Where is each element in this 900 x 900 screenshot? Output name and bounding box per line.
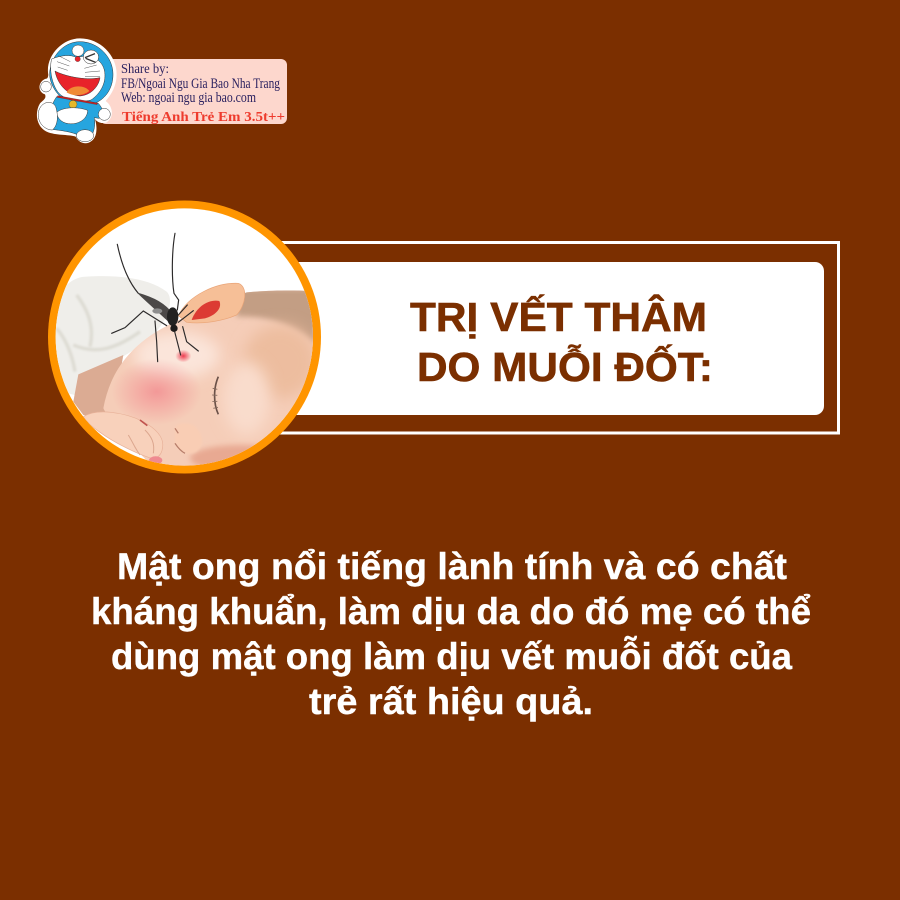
photo ring — [48, 200, 321, 474]
mosquito proboscis — [175, 332, 181, 355]
mascot belly pocket — [57, 108, 88, 124]
mosquito — [112, 233, 198, 362]
mosquito abdomen — [138, 293, 173, 321]
mascot winking lines — [85, 54, 96, 62]
finger lines — [128, 430, 154, 455]
mascot whiskers — [57, 56, 100, 77]
hair shading — [235, 290, 313, 342]
badge text: facebook: FB/Ngoai Ngu Gia Bao Nha Trang — [121, 76, 280, 92]
nostril — [175, 428, 185, 453]
mascot left foot — [38, 102, 57, 130]
temple tone — [243, 325, 317, 398]
title panel — [250, 262, 824, 415]
ear — [178, 283, 245, 323]
inner ear — [192, 301, 220, 320]
forehead highlight — [223, 362, 270, 435]
baby head — [104, 290, 313, 466]
body line 3: dùng mật ong làm dịu vết muỗi đốt của — [111, 636, 792, 677]
nose — [193, 450, 198, 452]
mosquito wing — [152, 308, 162, 314]
mascot blue body — [47, 97, 103, 139]
mascot right foot — [76, 130, 94, 142]
photo: mosquito on sleeping baby — [48, 200, 321, 474]
baby white shirt — [49, 276, 170, 399]
mascot left eye — [72, 45, 84, 56]
logo: share badge — [100, 59, 287, 124]
mosquito back leg 2 — [172, 233, 179, 310]
body line 4: trẻ rất hiệu quả. — [309, 681, 593, 722]
eye lashes — [215, 377, 218, 414]
mascot red mouth — [55, 71, 100, 96]
mascot left hand — [41, 81, 51, 92]
title frame outline — [260, 242, 838, 433]
mosquito left leg — [112, 311, 167, 333]
body line 1: Mật ong nổi tiếng lành tính và có chất — [117, 546, 787, 587]
lower shade — [188, 442, 256, 465]
mascot right eye — [83, 50, 99, 64]
mascot blue head — [50, 42, 113, 103]
white backdrop — [56, 208, 313, 466]
mascot white outline — [37, 38, 117, 143]
mascot right hand — [98, 108, 110, 120]
mosquito head — [170, 325, 178, 332]
title: line 1: TRỊ VẾT THÂM — [410, 294, 707, 340]
mosquito lower leg — [155, 321, 158, 362]
badge text: website: Web: ngoai ngu gia bao.com — [121, 90, 256, 106]
shoulder skin — [73, 355, 123, 422]
mosquito right legs — [178, 305, 198, 351]
cheek highlight — [133, 332, 220, 378]
title: line 2: DO MUỖI ĐỐT: — [417, 344, 713, 390]
hand — [83, 412, 163, 458]
badge text: course name: Tiếng Anh Trẻ Em 3.5t++ — [122, 109, 285, 124]
badge panel — [100, 59, 287, 124]
bite mark — [175, 350, 191, 362]
mascot bell — [69, 100, 77, 108]
body text — [91, 546, 811, 722]
mascot white face — [51, 56, 105, 101]
mascot red collar — [57, 96, 98, 105]
head base skin — [104, 290, 313, 466]
photo scene — [56, 208, 313, 466]
fingertip — [149, 456, 162, 464]
mouth shadow — [140, 420, 147, 426]
badge text: share by: Share by: — [121, 62, 169, 77]
shirt fold shadow — [57, 295, 140, 372]
cheek blush — [119, 362, 194, 420]
body line 2: kháng khuẩn, làm dịu da do đó mẹ có thể — [91, 591, 811, 632]
eyelash fringe — [212, 388, 218, 408]
icon: blue robot cat mascot — [37, 38, 117, 143]
mosquito back leg 1 — [117, 244, 138, 293]
mosquito thorax — [167, 307, 178, 326]
mascot red nose — [75, 56, 80, 62]
mascot orange tongue — [67, 86, 89, 95]
